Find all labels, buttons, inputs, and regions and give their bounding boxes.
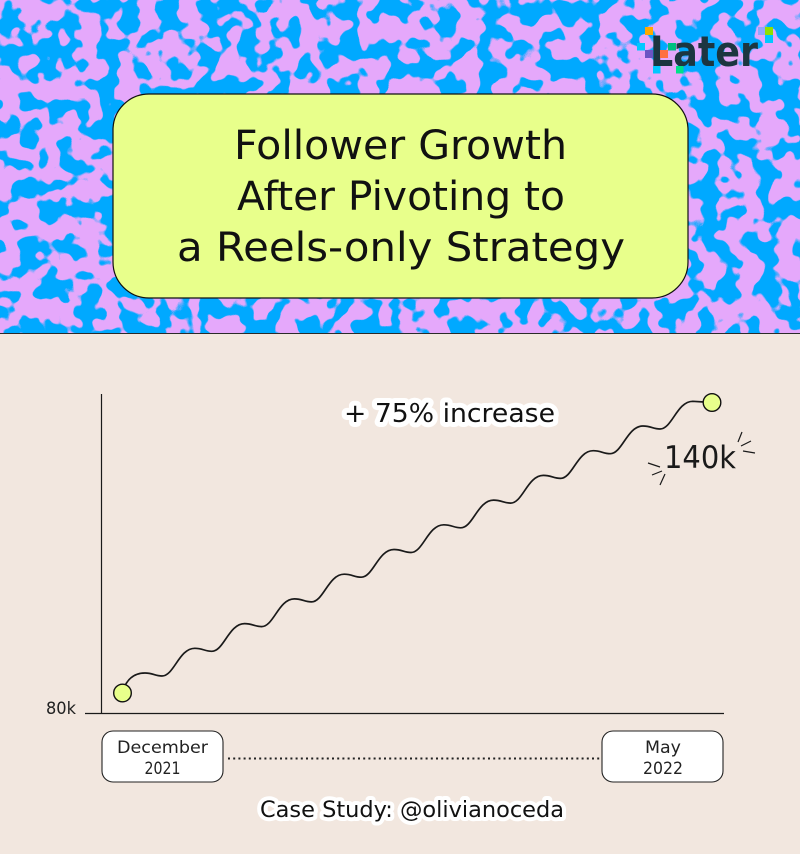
title: After Pivoting to <box>237 174 565 220</box>
title: a Reels-only Strategy <box>177 225 625 271</box>
timeline dotted connector <box>228 758 600 760</box>
logo: Later: Later <box>650 27 758 76</box>
end point marker <box>703 394 721 411</box>
chart axes <box>85 394 724 714</box>
date label: May 2022 <box>602 731 723 782</box>
date label: May 2022: May <box>645 738 681 757</box>
date label: December 2021: December <box>117 738 208 757</box>
callout: 140k with burst marks <box>648 432 755 485</box>
title panel <box>113 94 688 298</box>
date label: December 2021: 2021 <box>144 759 180 778</box>
callout: 75% increase: + 75% increase <box>344 399 555 429</box>
title: Follower Growth <box>234 123 567 169</box>
source credit: Case Study: @olivianoceda <box>260 798 564 823</box>
growth line <box>122 401 704 693</box>
start point marker <box>114 684 131 702</box>
title <box>177 123 625 271</box>
axis label: 80k: 80k <box>46 699 76 718</box>
date label: May 2022: 2022 <box>643 759 683 778</box>
date label: December 2021 <box>102 731 223 782</box>
patterned header background <box>0 0 800 334</box>
callout: 140k with burst marks: 140k <box>664 440 736 476</box>
